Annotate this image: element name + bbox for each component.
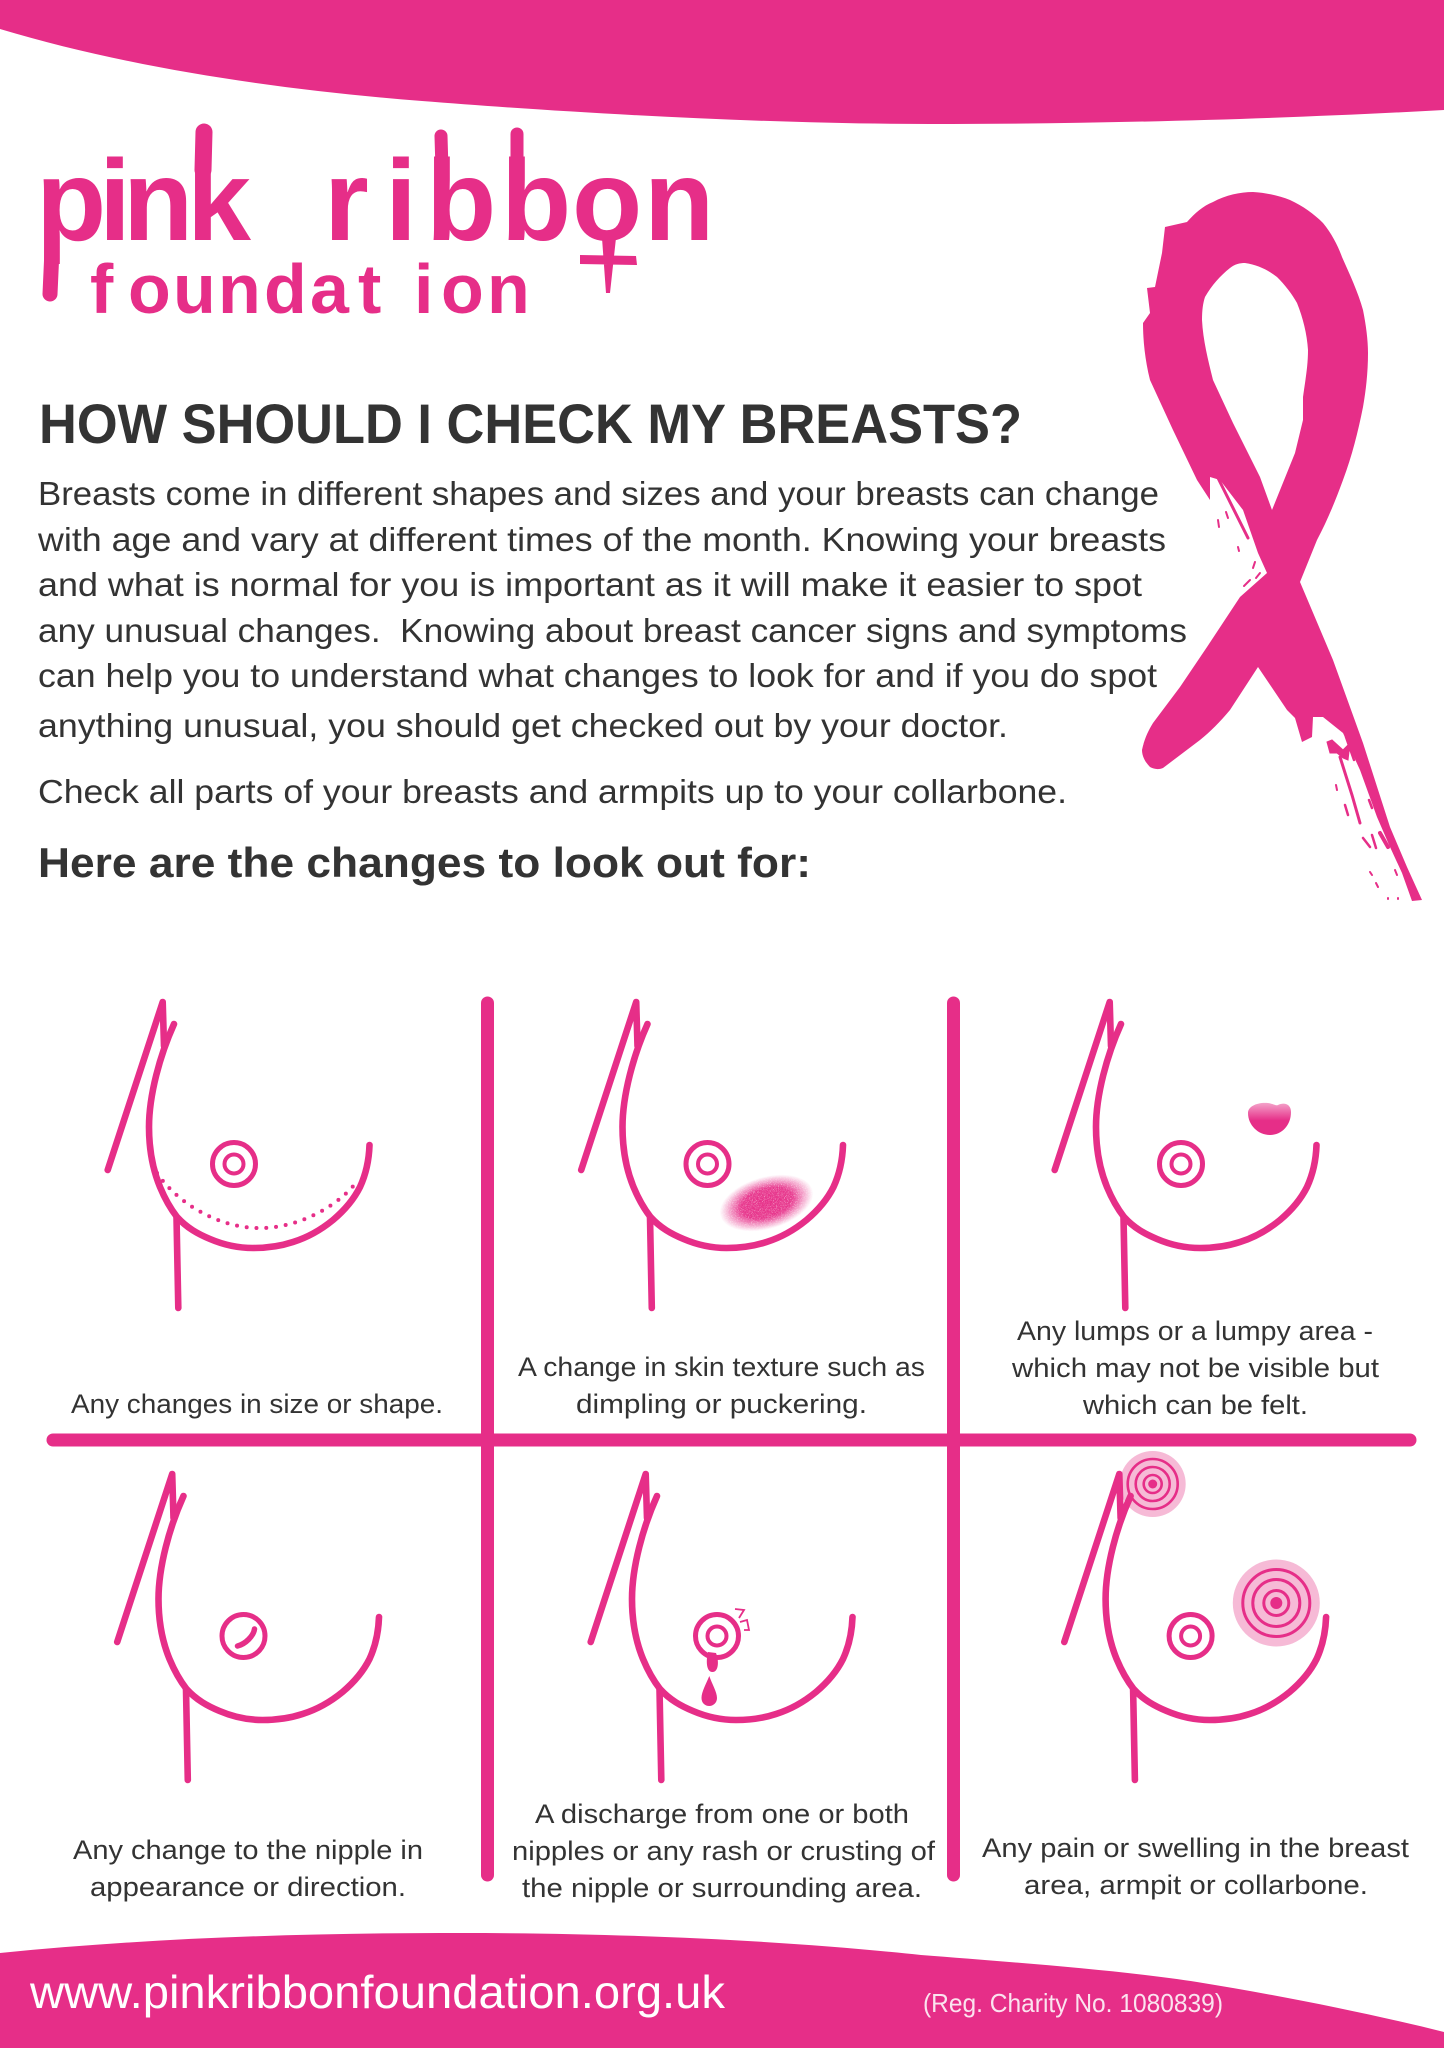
caption: Any pain or swelling in the breast	[982, 1833, 1410, 1863]
panel: nipple change	[73, 1474, 423, 1902]
intro paragraph	[37, 475, 1187, 744]
logo: pink ribbon foundation	[36, 132, 714, 328]
intro paragraph: any unusual changes. Knowing about breast cancer signs and symptoms	[38, 612, 1187, 649]
pink ribbon graphic	[1142, 192, 1422, 901]
caption: the nipple or surrounding area.	[522, 1873, 922, 1903]
caption: A change in skin texture such as	[518, 1352, 925, 1382]
subheading: Here are the changes to look out for:	[38, 839, 811, 886]
caption: Any changes in size or shape.	[71, 1389, 443, 1419]
heading: HOW SHOULD I CHECK MY BREASTS?	[39, 392, 1022, 455]
icon: breast outline	[1064, 1474, 1326, 1780]
icon: lump	[1248, 1103, 1291, 1135]
icon: breast outline	[591, 1474, 852, 1780]
logo wordmark: foundation: foundation	[90, 250, 530, 328]
caption: dimpling or puckering.	[576, 1389, 867, 1419]
top pink banner	[0, 0, 1444, 124]
footer banner	[0, 1933, 1444, 2048]
intro paragraph: can help you to understand what changes to look for and if you do spot	[38, 657, 1157, 694]
icon: breast outline with inverted nipple	[117, 1474, 379, 1780]
intro paragraph: with age and vary at different times of the month. Knowing your breasts	[37, 521, 1166, 558]
caption: Any change to the nipple in	[73, 1835, 423, 1865]
footer charity number: (Reg. Charity No. 1080839)	[923, 1988, 1223, 2018]
caption: area, armpit or collarbone.	[1024, 1870, 1368, 1900]
icon: discharge drops	[702, 1652, 718, 1706]
icon: skin puckering smudge	[713, 1165, 820, 1241]
icon: breast outline with dotted shape change	[108, 1002, 369, 1308]
icon: breast outline with dimpled area	[581, 1002, 843, 1308]
footer website: www.pinkribbonfoundation.org.uk	[29, 1966, 726, 2018]
logo wordmark: pink ribbon: pinkribbon	[36, 137, 714, 265]
caption	[518, 1352, 925, 1419]
panel: pain or swelling	[982, 1451, 1410, 1900]
ribbon: frayed brush marks	[1218, 478, 1398, 899]
instruction line: Check all parts of your breasts and armpits up to your collarbone.	[38, 773, 1067, 810]
caption	[982, 1833, 1410, 1900]
panel: lumps	[1011, 1002, 1380, 1420]
caption	[1011, 1316, 1380, 1420]
caption	[512, 1799, 936, 1903]
caption: which may not be visible but	[1011, 1353, 1380, 1383]
logo: female symbol cross	[580, 238, 637, 293]
logo: brush stroke extensions	[50, 132, 517, 294]
intro paragraph: and what is normal for you is important as it will make it easier to spot	[38, 566, 1142, 603]
caption: appearance or direction.	[90, 1872, 406, 1902]
icon: collarbone swelling	[1120, 1451, 1186, 1517]
caption: A discharge from one or both	[535, 1799, 909, 1829]
caption: Any lumps or a lumpy area -	[1017, 1316, 1373, 1346]
panel: size or shape	[71, 1002, 443, 1419]
intro paragraph: anything unusual, you should get checked out by your doctor.	[38, 707, 1008, 744]
caption: nipples or any rash or crusting of	[512, 1836, 936, 1866]
panel: skin texture	[518, 1002, 925, 1419]
panel: discharge	[512, 1474, 936, 1903]
icon: breast swelling	[1233, 1560, 1320, 1646]
icon: breast outline	[1055, 1002, 1316, 1308]
caption: which can be felt.	[1082, 1390, 1308, 1420]
icon: rash marks	[735, 1609, 749, 1630]
caption	[73, 1835, 423, 1902]
intro paragraph: Breasts come in different shapes and sizes and your breasts can change	[38, 475, 1159, 512]
grid dividers	[53, 1003, 1410, 1875]
